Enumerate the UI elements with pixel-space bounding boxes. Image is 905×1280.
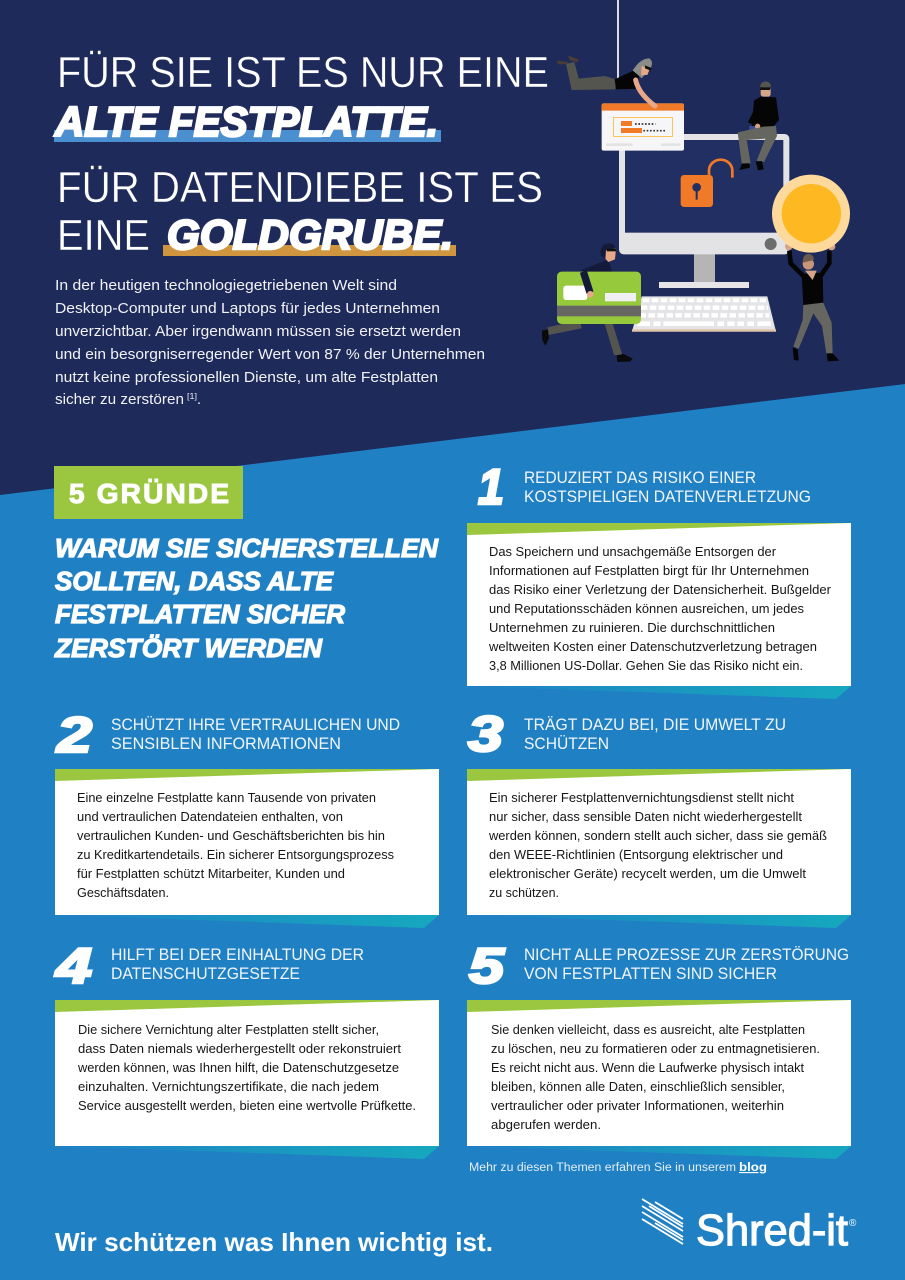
panel: reason 2: vertraulichen Kunden- und Geschäftsberichten bis hin [77, 828, 385, 843]
panel: reason 5: bleiben, können alle Daten, einschließlich sensibler, [491, 1079, 785, 1094]
reason 1 heading: KOSTSPIELIGEN DATENVERLETZUNG [524, 487, 811, 506]
panel: reason 4: Die sichere Vernichtung alter Festplatten stellt sicher, [78, 1022, 379, 1037]
reason 1 heading: 1 [478, 459, 504, 515]
reason 3 heading: TRÄGT DAZU BEI, DIE UMWELT ZU [524, 715, 786, 734]
panel: reason 5: zu löschen, neu zu formatieren oder zu entmagnetisieren. [491, 1041, 820, 1056]
subheading: ZERSTÖRT WERDEN [54, 634, 323, 663]
icon: rope [617, 0, 619, 89]
panel: reason 2: und vertraulichen Datendateien enthalten, von [77, 809, 343, 824]
icon: thief with credit card [542, 243, 641, 362]
panel: reason 1 [467, 523, 851, 699]
panel: reason 2: zu Kreditkartendetails. Ein sicherer Entsorgungsprozess [77, 847, 394, 862]
subheading: FESTPLATTEN SICHER [55, 601, 346, 629]
reason 4 heading: HILFT BEI DER EINHALTUNG DER [111, 945, 364, 964]
badge: 5 Gründe: 5 GRÜNDE [69, 478, 229, 509]
reason 5 heading: 5 [469, 938, 505, 994]
icon: open padlock [681, 160, 732, 207]
intro text: In der heutigen technologiegetriebenen Welt sind [55, 278, 397, 294]
blog note: blog [739, 1162, 767, 1174]
reason 4 heading [55, 938, 364, 994]
reason 5 heading [469, 938, 849, 994]
reason 2 heading: 2 [56, 707, 92, 763]
title: ALTE FESTPLATTE. [54, 98, 438, 145]
logo: Shred-it: ® [849, 1218, 857, 1229]
title: FÜR SIE IST ES NUR EINE [57, 48, 549, 97]
reason 5 heading: VON FESTPLATTEN SIND SICHER [524, 964, 777, 983]
panel: reason 1: Das Speichern und unsachgemäße Entsorgen der [489, 544, 777, 559]
title: EINE [57, 211, 150, 260]
badge: 5 Gründe [54, 466, 243, 519]
icon: keyboard [632, 296, 776, 332]
panel: reason 1: und Reputationsschäden können ausreichen, um jedes [489, 601, 804, 616]
panel: reason 2: für Festplatten schützt Mitarbeiter, Kunden und [77, 866, 345, 881]
panel: reason 5: abgerufen werden. [491, 1117, 601, 1132]
subheading: WARUM SIE SICHERSTELLEN [55, 535, 439, 563]
reason 3 heading: SCHÜTZEN [524, 734, 609, 753]
reason 2 heading [56, 707, 400, 763]
icon: monitor [619, 134, 789, 288]
intro text: unverzichtbar. Aber irgendwann müssen sie ersetzt werden [55, 324, 461, 340]
logo: Shred-it [642, 1199, 857, 1255]
panel: reason 4: einzuhalten. Vernichtungszertifikate, die nach jedem [78, 1079, 379, 1094]
panel: reason 3: elektronischer Geräte) recycelt werden, um die Umwelt [489, 866, 806, 881]
intro text: Desktop-Computer und Laptops für jedes Unternehmen [55, 301, 440, 317]
panel: reason 1: Unternehmen zu ruinieren. Die durchschnittlichen [489, 620, 775, 635]
intro text: . [197, 392, 201, 408]
panel: reason 2: Geschäftsdaten. [77, 885, 169, 900]
panel: reason 5: Es reicht nicht aus. Wenn die Laufwerke physisch intakt [491, 1060, 804, 1075]
panel: reason 3: werden können, sondern stellt auch sicher, dass sie gemäß [488, 828, 827, 843]
icon: login window [602, 103, 684, 151]
reason 3 heading: 3 [468, 706, 503, 762]
panel: reason 2 [55, 769, 439, 928]
icon: hanging thief [557, 55, 655, 106]
subheading: SOLLTEN, DASS ALTE [55, 568, 334, 596]
logo: Shred-it: Shred-it [696, 1206, 848, 1255]
intro text [55, 278, 485, 408]
panel: reason 1: weltweiten Kosten einer Datenschutzverletzung betragen [488, 639, 817, 654]
slogan: Wir schützen was Ihnen wichtig ist. [55, 1227, 493, 1257]
panel: reason 5: vertraulicher oder privater Informationen, weiterhin [491, 1098, 784, 1113]
blog note: Mehr zu diesen Themen erfahren Sie in unserem [469, 1162, 736, 1174]
reason 2 heading: SCHÜTZT IHRE VERTRAULICHEN UND [111, 715, 400, 734]
panel: reason 2: Eine einzelne Festplatte kann Tausende von privaten [77, 790, 376, 805]
panel: reason 3: Ein sicherer Festplattenvernichtungsdienst stellt nicht [489, 790, 794, 805]
intro text: und ein besorgniserregender Wert von 87 % der Unternehmen [55, 347, 485, 363]
panel: reason 1: 3,8 Millionen US-Dollar. Gehen Sie das Risiko nicht ein. [489, 658, 803, 673]
background: blue diagonal section [0, 384, 905, 1280]
subheading [54, 535, 439, 663]
title: FÜR DATENDIEBE IST ES [57, 163, 543, 212]
reason 1 heading: REDUZIERT DAS RISIKO EINER [524, 468, 756, 487]
reason 2 heading: SENSIBLEN INFORMATIONEN [111, 734, 341, 753]
panel: reason 3: zu schützen. [489, 885, 559, 900]
panel: reason 5: Sie denken vielleicht, dass es ausreicht, alte Festplatten [491, 1022, 805, 1037]
reason 5 heading: NICHT ALLE PROZESSE ZUR ZERSTÖRUNG [524, 945, 849, 964]
intro text: sicher zu zerstören [55, 392, 184, 408]
title [54, 48, 549, 260]
panel: reason 1: Informationen auf Festplatten birgt für Ihr Unternehmen [489, 563, 809, 578]
reason 3 heading [468, 706, 786, 762]
panel: reason 5 [467, 1000, 851, 1159]
panel: reason 3: nur sicher, dass sensible Daten nicht wiederhergestellt [489, 809, 802, 824]
illustration: hackers attacking a computer [542, 0, 850, 362]
reason 4 heading: DATENSCHUTZGESETZE [111, 964, 300, 983]
icon: gold coin with thief [772, 175, 850, 361]
reason 4 heading: 4 [55, 938, 92, 994]
panel: reason 4: dass Daten niemals wiederhergestellt oder rekonstruiert [78, 1041, 401, 1056]
icon: sitting thief [738, 81, 779, 170]
intro text: nutzt keine professionellen Dienste, um alte Festplatten [55, 370, 438, 386]
panel: reason 3 [467, 769, 851, 928]
panel: reason 4: werden können, was Ihnen hilft, die Datenschutzgesetze [77, 1060, 399, 1075]
reason 1 heading [478, 459, 811, 515]
intro text: [1] [187, 392, 197, 401]
panel: reason 4: Service ausgestellt werden, bieten eine wertvolle Prüfkette. [78, 1098, 416, 1113]
title: GOLDGRUBE. [167, 211, 453, 258]
panel: reason 4 [55, 1000, 439, 1159]
panel: reason 3: den WEEE-Richtlinien (Entsorgung elektrischer und [489, 847, 783, 862]
panel: reason 1: das Risiko einer Verletzung der Datensicherheit. Bußgelder [489, 582, 832, 597]
